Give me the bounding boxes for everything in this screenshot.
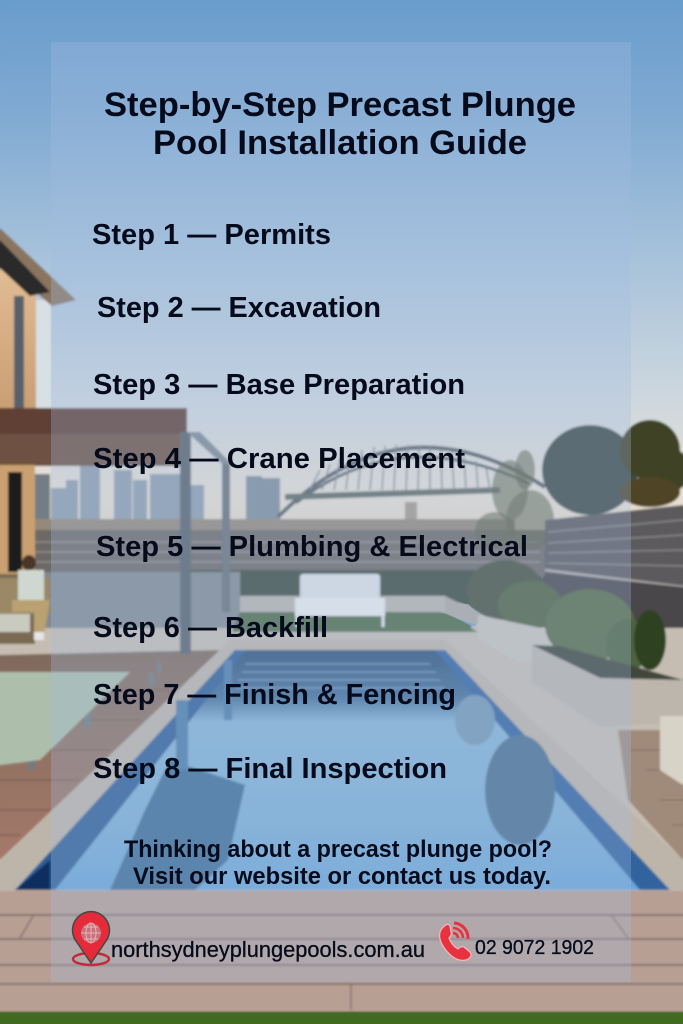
lower paving <box>0 891 683 1011</box>
water ripples <box>235 664 445 688</box>
pool water <box>15 650 670 890</box>
slatted fence right <box>545 505 683 590</box>
step 3: Step 3 — Base Preparation <box>93 369 465 401</box>
translucent panel <box>51 42 631 982</box>
step 6: Step 6 — Backfill <box>93 612 328 644</box>
call to action: Thinking about a precast plunge pool? <box>124 836 552 863</box>
glass balustrade zone <box>35 572 240 652</box>
harbour bridge <box>278 445 545 524</box>
call to action <box>124 836 552 890</box>
city skyline <box>35 465 280 530</box>
step 8: Step 8 — Final Inspection <box>93 753 447 785</box>
planters and shrubs <box>478 581 683 785</box>
far shoreline <box>35 519 515 532</box>
title <box>104 86 576 162</box>
step 7: Step 7 — Finish & Fencing <box>93 679 456 711</box>
right deck <box>618 730 683 860</box>
step 4: Step 4 — Crane Placement <box>93 443 465 475</box>
tree foliage <box>467 420 683 620</box>
sky <box>0 0 683 540</box>
house lower storey fascia and pergola <box>0 408 232 654</box>
icon: location pin with globe <box>72 912 109 965</box>
glass balustrade reflections <box>0 672 130 765</box>
house upper storey <box>0 228 76 410</box>
icon: red telephone with signal waves <box>440 923 471 960</box>
pool side tiles <box>15 650 246 890</box>
title: Pool Installation Guide <box>153 124 527 162</box>
back fence <box>35 530 565 575</box>
phone number: 02 9072 1902 <box>475 937 594 959</box>
glass balustrade posts <box>28 662 161 770</box>
title: Step-by-Step Precast Plunge <box>104 86 576 124</box>
website address: northsydneyplungepools.com.au <box>111 937 425 962</box>
seated guest and sofa <box>0 555 50 640</box>
garden bed behind lounge <box>190 570 520 602</box>
pool coping <box>0 640 683 892</box>
step 2: Step 2 — Excavation <box>97 292 381 324</box>
back planter <box>240 596 445 612</box>
deck and paving <box>0 628 683 892</box>
step 1: Step 1 — Permits <box>92 219 331 251</box>
lawn <box>232 612 478 632</box>
tree reflection in pool <box>110 660 555 890</box>
step list <box>92 219 528 785</box>
dark wall right <box>545 572 683 690</box>
call to action: Visit our website or contact us today. <box>133 863 551 890</box>
outdoor lounge <box>295 574 385 627</box>
step 5: Step 5 — Plumbing & Electrical <box>96 531 528 563</box>
grass strip <box>0 1012 683 1024</box>
